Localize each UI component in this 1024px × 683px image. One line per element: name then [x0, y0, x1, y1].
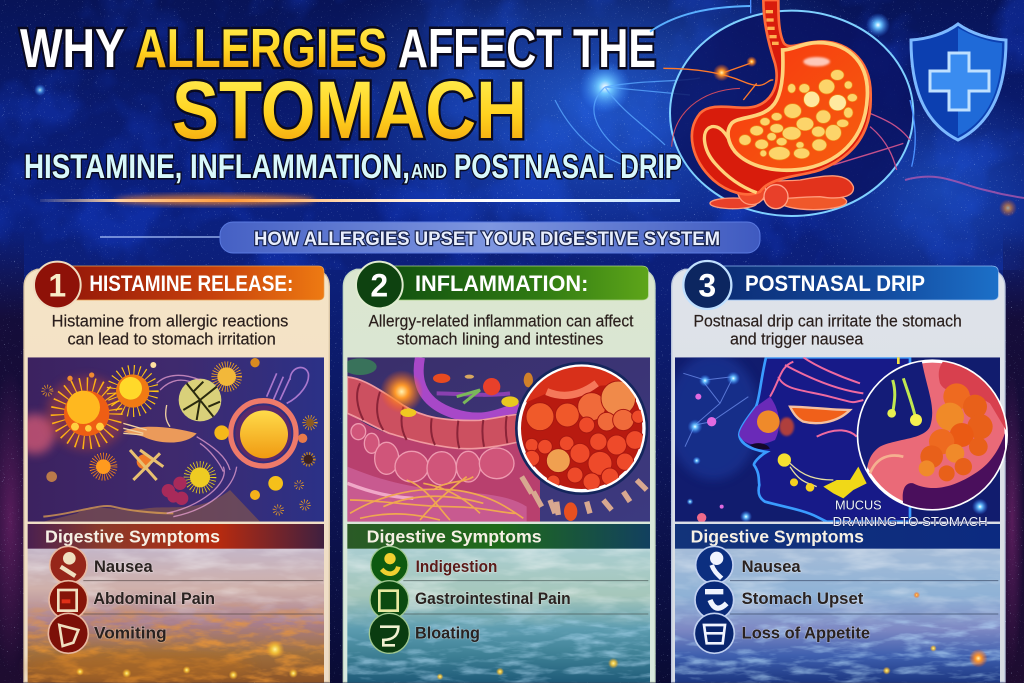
- panel 3 description: Postnasal drip can irritate the stomach: [693, 313, 962, 331]
- title line two: stomach: STOMACH: [172, 65, 527, 156]
- symptom: abdominal pain: [49, 581, 215, 619]
- symptom: stomach upset: [695, 581, 864, 619]
- inflammation burst: [380, 370, 423, 413]
- title line one: AFFECT THE: [398, 17, 656, 79]
- esophagus rings: [766, 10, 779, 45]
- panel 1 description: can lead to stomach irritation: [67, 330, 276, 348]
- title: [20, 17, 682, 186]
- stomach lumps: [739, 70, 857, 160]
- stomach outer tube: [692, 0, 871, 194]
- panel 1: histamine release: [15, 262, 329, 683]
- icon: small viruses: [43, 365, 315, 514]
- magnified lens: [515, 362, 650, 495]
- panel 2 number badge: [356, 262, 403, 308]
- panel 1 card: [24, 269, 329, 682]
- panel 1 number badge: [34, 262, 81, 308]
- icon: mast cell: [214, 401, 307, 500]
- panel 2 heading: INFLAMMATION:: [415, 271, 588, 296]
- panel 3 symptoms background: [675, 548, 1000, 683]
- section banner: [220, 222, 760, 253]
- stomach highlight: [803, 57, 830, 66]
- stomach illustration: [650, 0, 915, 216]
- symptom: loss of appetite: [694, 613, 870, 653]
- duodenum lining: [704, 127, 757, 193]
- subtitle: AND: [411, 161, 447, 183]
- panel 2 symptoms band: Digestive Symptoms: [367, 527, 542, 547]
- oval halo outline: [650, 0, 915, 216]
- symptom: vomiting: [48, 613, 167, 653]
- title line one: [20, 17, 656, 79]
- icon: bacterium spindle: [123, 405, 197, 443]
- panel 2 description: Allergy-related inflammation can affect: [368, 313, 634, 331]
- intestine folds: [347, 377, 540, 522]
- symptom: abdominal pain: Abdominal Pain: [93, 589, 215, 608]
- stomach inner lining: [728, 43, 867, 170]
- symptom: nausea: Nausea: [94, 557, 153, 576]
- panel 3 illustration: [667, 353, 1000, 523]
- panel 1 description: Histamine from allergic reactions: [52, 313, 288, 331]
- panel 1 symptoms background: [27, 548, 324, 683]
- title line one: WHY: [20, 17, 125, 79]
- panel 2 symptoms list: [369, 546, 648, 680]
- icon: yellow virus: [113, 371, 153, 411]
- panel 2: inflammation: [343, 262, 655, 683]
- divider glow line: [40, 195, 680, 205]
- panel 3 description: and trigger nausea: [730, 330, 864, 348]
- symptom: nausea: [696, 546, 801, 584]
- panel 2 description: stomach lining and intestines: [397, 330, 603, 348]
- panel 3 heading: POSTNASAL DRIP: [745, 271, 925, 296]
- panel 2 symptoms background: [347, 548, 650, 683]
- icon: pollen ball: [179, 379, 221, 421]
- panel 3 symptoms band: [675, 524, 1000, 549]
- panel 1 symptoms band: Digestive Symptoms: [45, 527, 220, 547]
- symptom: indigestion: [371, 546, 497, 584]
- icon: medical shield: [911, 24, 1006, 140]
- purple vessels: [419, 357, 520, 418]
- panel 2 card: [343, 269, 655, 682]
- constellation: [683, 373, 748, 447]
- symptom: stomach upset: Stomach Upset: [742, 589, 864, 608]
- icon: mite: [130, 450, 163, 480]
- symptom: vomiting: Vomiting: [94, 623, 167, 642]
- symptom: bloating: Bloating: [415, 623, 480, 642]
- inflamed tissue: [919, 383, 993, 481]
- icon: pink allergen: [162, 477, 188, 505]
- panel 3 number badge: 3: [698, 267, 716, 303]
- curved lines: [157, 375, 237, 517]
- panel 3 symptoms list: [694, 546, 998, 675]
- panel 1 number badge: 1: [48, 267, 66, 303]
- symptom: nausea: [50, 546, 153, 584]
- panel 1 header bar: [34, 262, 324, 308]
- mucus label: DRAINING TO STOMACH: [833, 515, 988, 529]
- symptom: gastrointestinal pain: [370, 581, 571, 619]
- spikes under lens: [522, 477, 647, 515]
- symptom: gastrointestinal pain: Gastrointestinal Pain: [415, 589, 571, 608]
- mucus label: MUCUS: [835, 498, 882, 512]
- symptom: nausea: Nausea: [742, 557, 801, 576]
- panel 3: postnasal drip: [667, 261, 1010, 683]
- panel 2 description: [368, 313, 634, 348]
- panel 3 description: [693, 313, 962, 348]
- banner text: HOW ALLERGIES UPSET YOUR DIGESTIVE SYSTEM: [254, 229, 720, 250]
- panel 3 symptoms band: Digestive Symptoms: [691, 527, 864, 547]
- symptom: loss of appetite: Loss of Appetite: [742, 623, 870, 642]
- panel 1 symptoms list: [48, 546, 323, 680]
- panel 1 heading: HISTAMINE RELEASE:: [89, 271, 293, 296]
- fibre tangle: [350, 477, 523, 520]
- panel 3 number badge: [683, 261, 731, 309]
- title line one: ALLERGIES: [135, 17, 387, 79]
- icon: shield cross: [930, 53, 989, 110]
- floating particles: [400, 373, 533, 417]
- panel 1 illustration: [15, 357, 324, 522]
- symptom: indigestion: Indigestion: [416, 557, 497, 576]
- subtitle: HISTAMINE, INFLAMMATION,: [24, 148, 410, 186]
- panel 3 card: [672, 269, 1005, 682]
- panel 2 illustration: [343, 357, 650, 522]
- panel 2 number badge: 2: [370, 267, 388, 303]
- intestines: [710, 176, 853, 210]
- nerve lines: [663, 63, 910, 170]
- panel 1 symptoms band: [28, 524, 324, 549]
- subtitle: POSTNASAL DRIP: [454, 148, 682, 186]
- panel 1 description: [52, 313, 288, 348]
- magnified stomach lens: [856, 359, 1008, 511]
- panel 2 symptoms band: [347, 524, 650, 549]
- icon: large virus: [58, 385, 115, 442]
- mucus label: [833, 498, 988, 529]
- symptom: bloating: [369, 613, 480, 653]
- panel 3 header bar: [683, 261, 998, 309]
- face silhouette: [739, 357, 910, 522]
- panel 2 header bar: [356, 262, 648, 308]
